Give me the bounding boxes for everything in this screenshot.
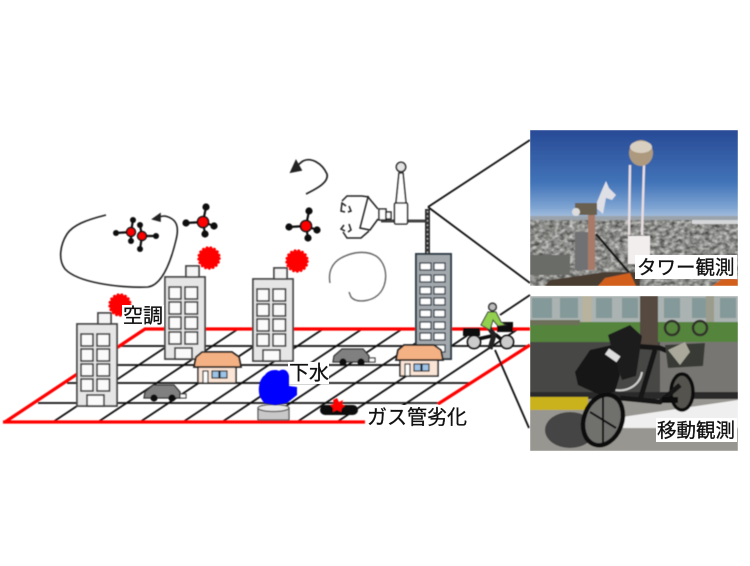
label: tower observation: タワー観測 [637, 257, 735, 279]
icon: degraded gas pipe [320, 398, 358, 415]
car: centre [333, 349, 375, 366]
car: left [144, 385, 186, 402]
label: gas pipe degradation: ガス管劣化 [367, 406, 467, 429]
icon: red emission air conditioning [109, 294, 131, 316]
photo: mobile observation [530, 296, 738, 451]
arrow: grey swirl below sensor [329, 252, 386, 301]
label: sewer: 下水 [289, 362, 329, 384]
icon: blue sewer emission [259, 370, 297, 405]
icon: red emission centre left [198, 247, 220, 269]
icon: methane molecule pair [113, 217, 159, 252]
icon: tower sensor instruments [341, 162, 425, 238]
icon: tower mast [425, 209, 430, 254]
building: observation tower block [416, 254, 451, 359]
street grid [3, 329, 530, 422]
building: left [77, 313, 117, 406]
icon: observation bicycle [463, 303, 514, 349]
label: mobile observation: 移動観測 [657, 420, 735, 442]
icon: methane molecule right [182, 203, 218, 238]
label: air conditioning: 空調 [123, 304, 163, 328]
illustration: urban observation scene [3, 140, 530, 428]
icon: red emission centre [286, 250, 308, 272]
photo: tower observation [530, 130, 738, 286]
arrow: swirl with molecule on the left [61, 214, 177, 287]
connector: bicycle to mobile photo [495, 295, 530, 428]
connector: tower to tower photo [428, 140, 530, 283]
icon: sewer manhole [258, 404, 289, 420]
arrow: swirl at top [291, 160, 327, 194]
house: right [396, 345, 443, 376]
house: left [194, 352, 241, 383]
building: centre left [165, 266, 205, 359]
building: centre [253, 268, 293, 361]
icon: methane molecule centre [285, 207, 321, 242]
